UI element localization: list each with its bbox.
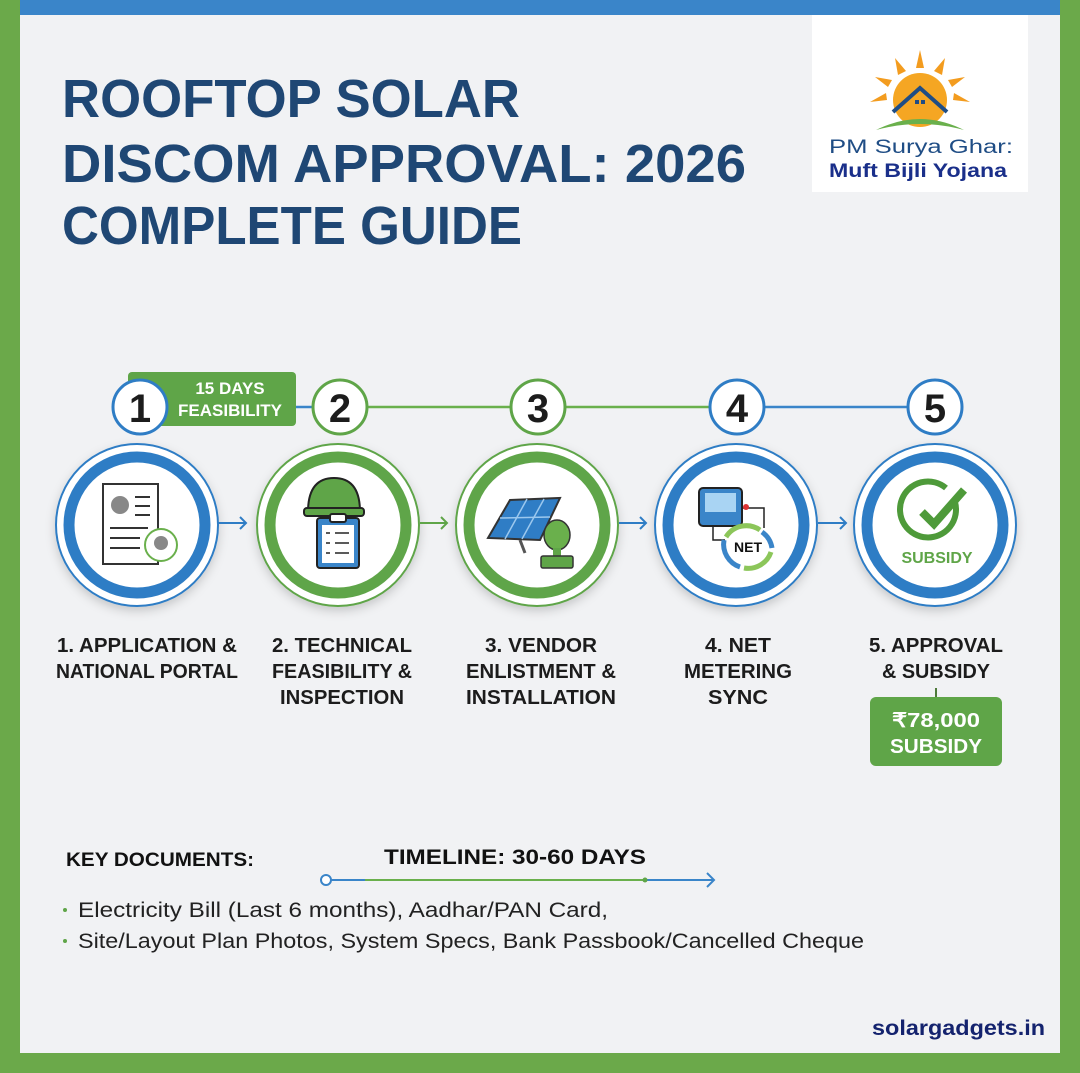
arrows between circles <box>218 517 846 529</box>
step labels: SYNC <box>708 687 768 709</box>
step labels: NATIONAL PORTAL <box>56 661 238 683</box>
step labels: ENLISTMENT & <box>466 661 616 683</box>
top blue bar <box>20 0 1060 15</box>
step labels: 5. APPROVAL <box>869 635 1003 657</box>
step labels: 1. APPLICATION & <box>57 635 237 657</box>
icon: document <box>103 484 177 564</box>
number circles: 1 <box>129 387 151 431</box>
icon: solar panel with stamp <box>488 498 573 568</box>
callout: subsidy amount: SUBSIDY <box>890 736 983 758</box>
footer url: solargadgets.in <box>872 1017 1045 1040</box>
title: DISCOM APPROVAL: 2026 <box>62 134 746 194</box>
step labels: METERING <box>684 661 792 683</box>
step labels: INSTALLATION <box>466 687 616 709</box>
icon: subsidy check <box>900 481 973 567</box>
logo: PM Surya Ghar <box>812 15 1028 192</box>
step labels: FEASIBILITY & <box>272 661 412 683</box>
step labels: 3. VENDOR <box>485 635 598 657</box>
badge: 15 days feasibility: FEASIBILITY <box>178 401 283 420</box>
badge: 15 days feasibility: 15 DAYS <box>195 379 265 398</box>
document list: Electricity Bill (Last 6 months), Aadhar/PAN Card, <box>78 899 608 922</box>
timeline <box>321 846 714 887</box>
logo: PM Surya Ghar: Muft Bijli Yojana <box>829 161 1008 182</box>
step labels: 4. NET <box>705 635 771 657</box>
icon: subsidy check: SUBSIDY <box>901 550 973 567</box>
timeline: TIMELINE: 30-60 DAYS <box>384 846 646 869</box>
title <box>62 69 746 256</box>
document list: Site/Layout Plan Photos, System Specs, Bank Passbook/Cancelled Cheque <box>78 930 864 953</box>
step circles <box>56 444 1016 606</box>
badge: 15 days feasibility <box>128 372 296 426</box>
icon: net meter <box>699 488 772 568</box>
logo: PM Surya Ghar: PM Surya Ghar: <box>829 137 1013 158</box>
title: COMPLETE GUIDE <box>62 196 522 256</box>
step labels <box>56 635 1003 709</box>
callout: subsidy amount: ₹78,000 <box>892 710 980 732</box>
document list <box>63 899 864 953</box>
number circles <box>113 380 962 434</box>
step labels: 2. TECHNICAL <box>272 635 412 657</box>
icon: net meter: NET <box>734 539 762 555</box>
key documents heading: KEY DOCUMENTS: <box>66 850 254 871</box>
number circles: 4 <box>726 387 749 431</box>
number circles: 5 <box>924 387 946 431</box>
number circles: 2 <box>329 387 351 431</box>
callout: subsidy amount <box>870 688 1002 766</box>
number circles: 3 <box>527 387 549 431</box>
step labels: & SUBSIDY <box>882 661 991 683</box>
step labels: INSPECTION <box>280 687 404 709</box>
connector line <box>168 406 907 408</box>
title: ROOFTOP SOLAR <box>62 69 520 129</box>
icon: helmet clipboard <box>304 478 364 568</box>
